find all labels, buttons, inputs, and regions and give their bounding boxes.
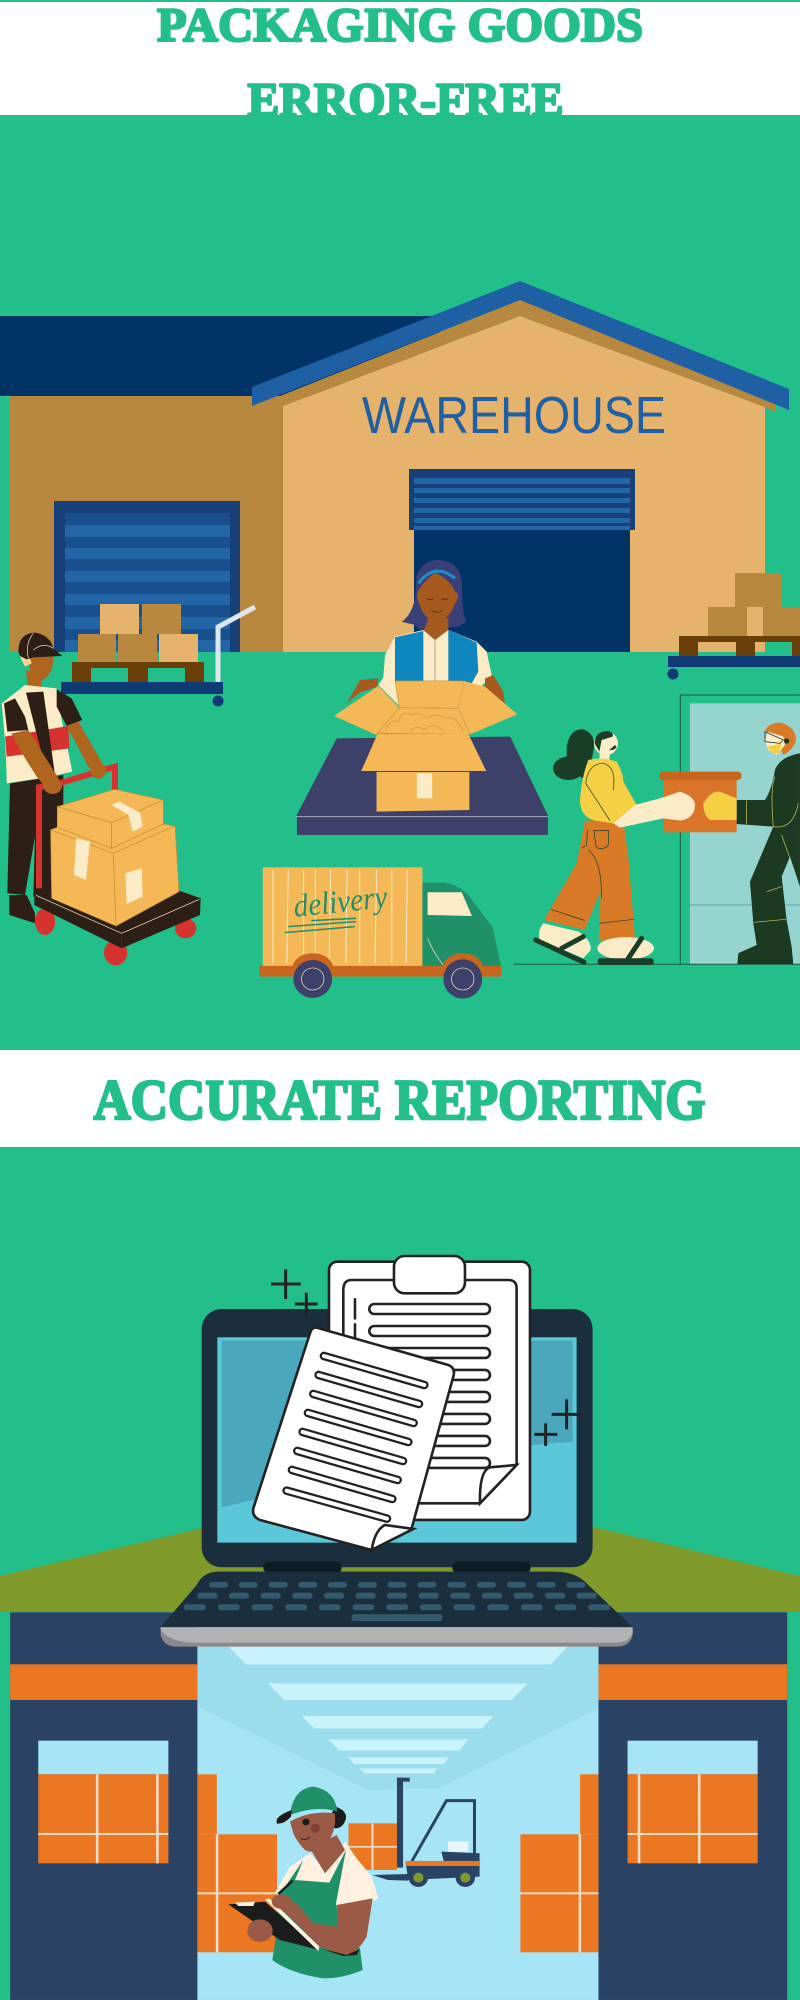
stacked boxes: [51, 789, 179, 926]
customer pants: [544, 821, 635, 941]
clipboard document: [329, 1256, 530, 1520]
woman torso: [347, 630, 505, 707]
illustration: packing table: [296, 737, 548, 835]
right loading door: [409, 469, 635, 652]
panel: packaging scene background: [0, 115, 800, 1050]
illustration: left pallet cart with boxes: [61, 604, 255, 706]
aisle boxes right: [520, 1774, 598, 1952]
illustration: right pallet cart with boxes: [668, 573, 800, 680]
hair: [331, 1807, 346, 1828]
loose paper sheet: [253, 1328, 454, 1550]
right window with boxes: [628, 1741, 758, 1863]
illustration: worker with clipboard: [228, 1787, 378, 1978]
distant boxes: [348, 1823, 397, 1870]
laptop lid and screen: [202, 1309, 593, 1573]
shirt: [275, 1842, 378, 1917]
cart handle: [39, 767, 115, 888]
keyboard: [161, 1572, 633, 1647]
left window with boxes: [38, 1741, 168, 1863]
heading text: ACCURATE REPORTING: [94, 1069, 706, 1132]
illustration: worker pushing cart with boxes: [2, 633, 201, 965]
panel: reporting scene background: [0, 1147, 800, 2000]
left loading door: [54, 501, 240, 652]
title: packaging goods error-free: [157, 0, 643, 127]
worker head and cap: [18, 633, 62, 680]
illustration: woman packing box: [334, 560, 517, 735]
sparkle marks: [271, 1269, 581, 1446]
illustration: box front on table: [361, 734, 486, 812]
warehouse sign: WAREHOUSE: [362, 387, 666, 445]
box tape: [74, 802, 143, 904]
customer top: [580, 759, 637, 823]
illustration: laptop: [161, 1256, 633, 1647]
aisle boxes left: [197, 1774, 277, 1952]
illustration: delivery truck: [259, 867, 502, 999]
parcel: [659, 772, 742, 832]
doorway: [514, 695, 800, 964]
worker legs: [7, 775, 63, 923]
woman face: [417, 571, 458, 640]
illustration: warehouse interior: [10, 1612, 787, 2000]
cart platform: [34, 890, 201, 948]
illustration: warehouse building: [0, 281, 789, 652]
background: olive hills: [0, 1528, 800, 1612]
heading band: accurate reporting: [0, 1050, 800, 1147]
courier head: [765, 723, 796, 755]
customer head: [594, 731, 618, 760]
arm: [273, 1895, 373, 1955]
title: packaging goods error-free: ERROR-FREE: [248, 74, 564, 127]
courier hand: [703, 791, 737, 820]
woman hair: [402, 560, 467, 630]
hands and pen: [247, 1881, 293, 1942]
ceiling and lights: [197, 1612, 598, 1790]
customer feet: [536, 923, 654, 965]
cart wheels: [35, 908, 196, 965]
title: packaging goods error-free: PACKAGING GOODS: [157, 0, 643, 52]
worker arms: [12, 722, 107, 794]
courier body: [737, 753, 800, 964]
forklift: [372, 1778, 480, 1887]
neck and face: [290, 1813, 345, 1873]
truck lettering: delivery: [292, 878, 390, 924]
customer hair: [553, 729, 594, 780]
worker torso: [2, 670, 82, 783]
clipboard: [228, 1898, 359, 1956]
illustration: customer receiving parcel from courier: [514, 695, 800, 965]
apron: [272, 1850, 363, 1978]
open box flaps: [334, 681, 517, 735]
customer arm: [613, 792, 695, 828]
cap: [277, 1787, 337, 1824]
